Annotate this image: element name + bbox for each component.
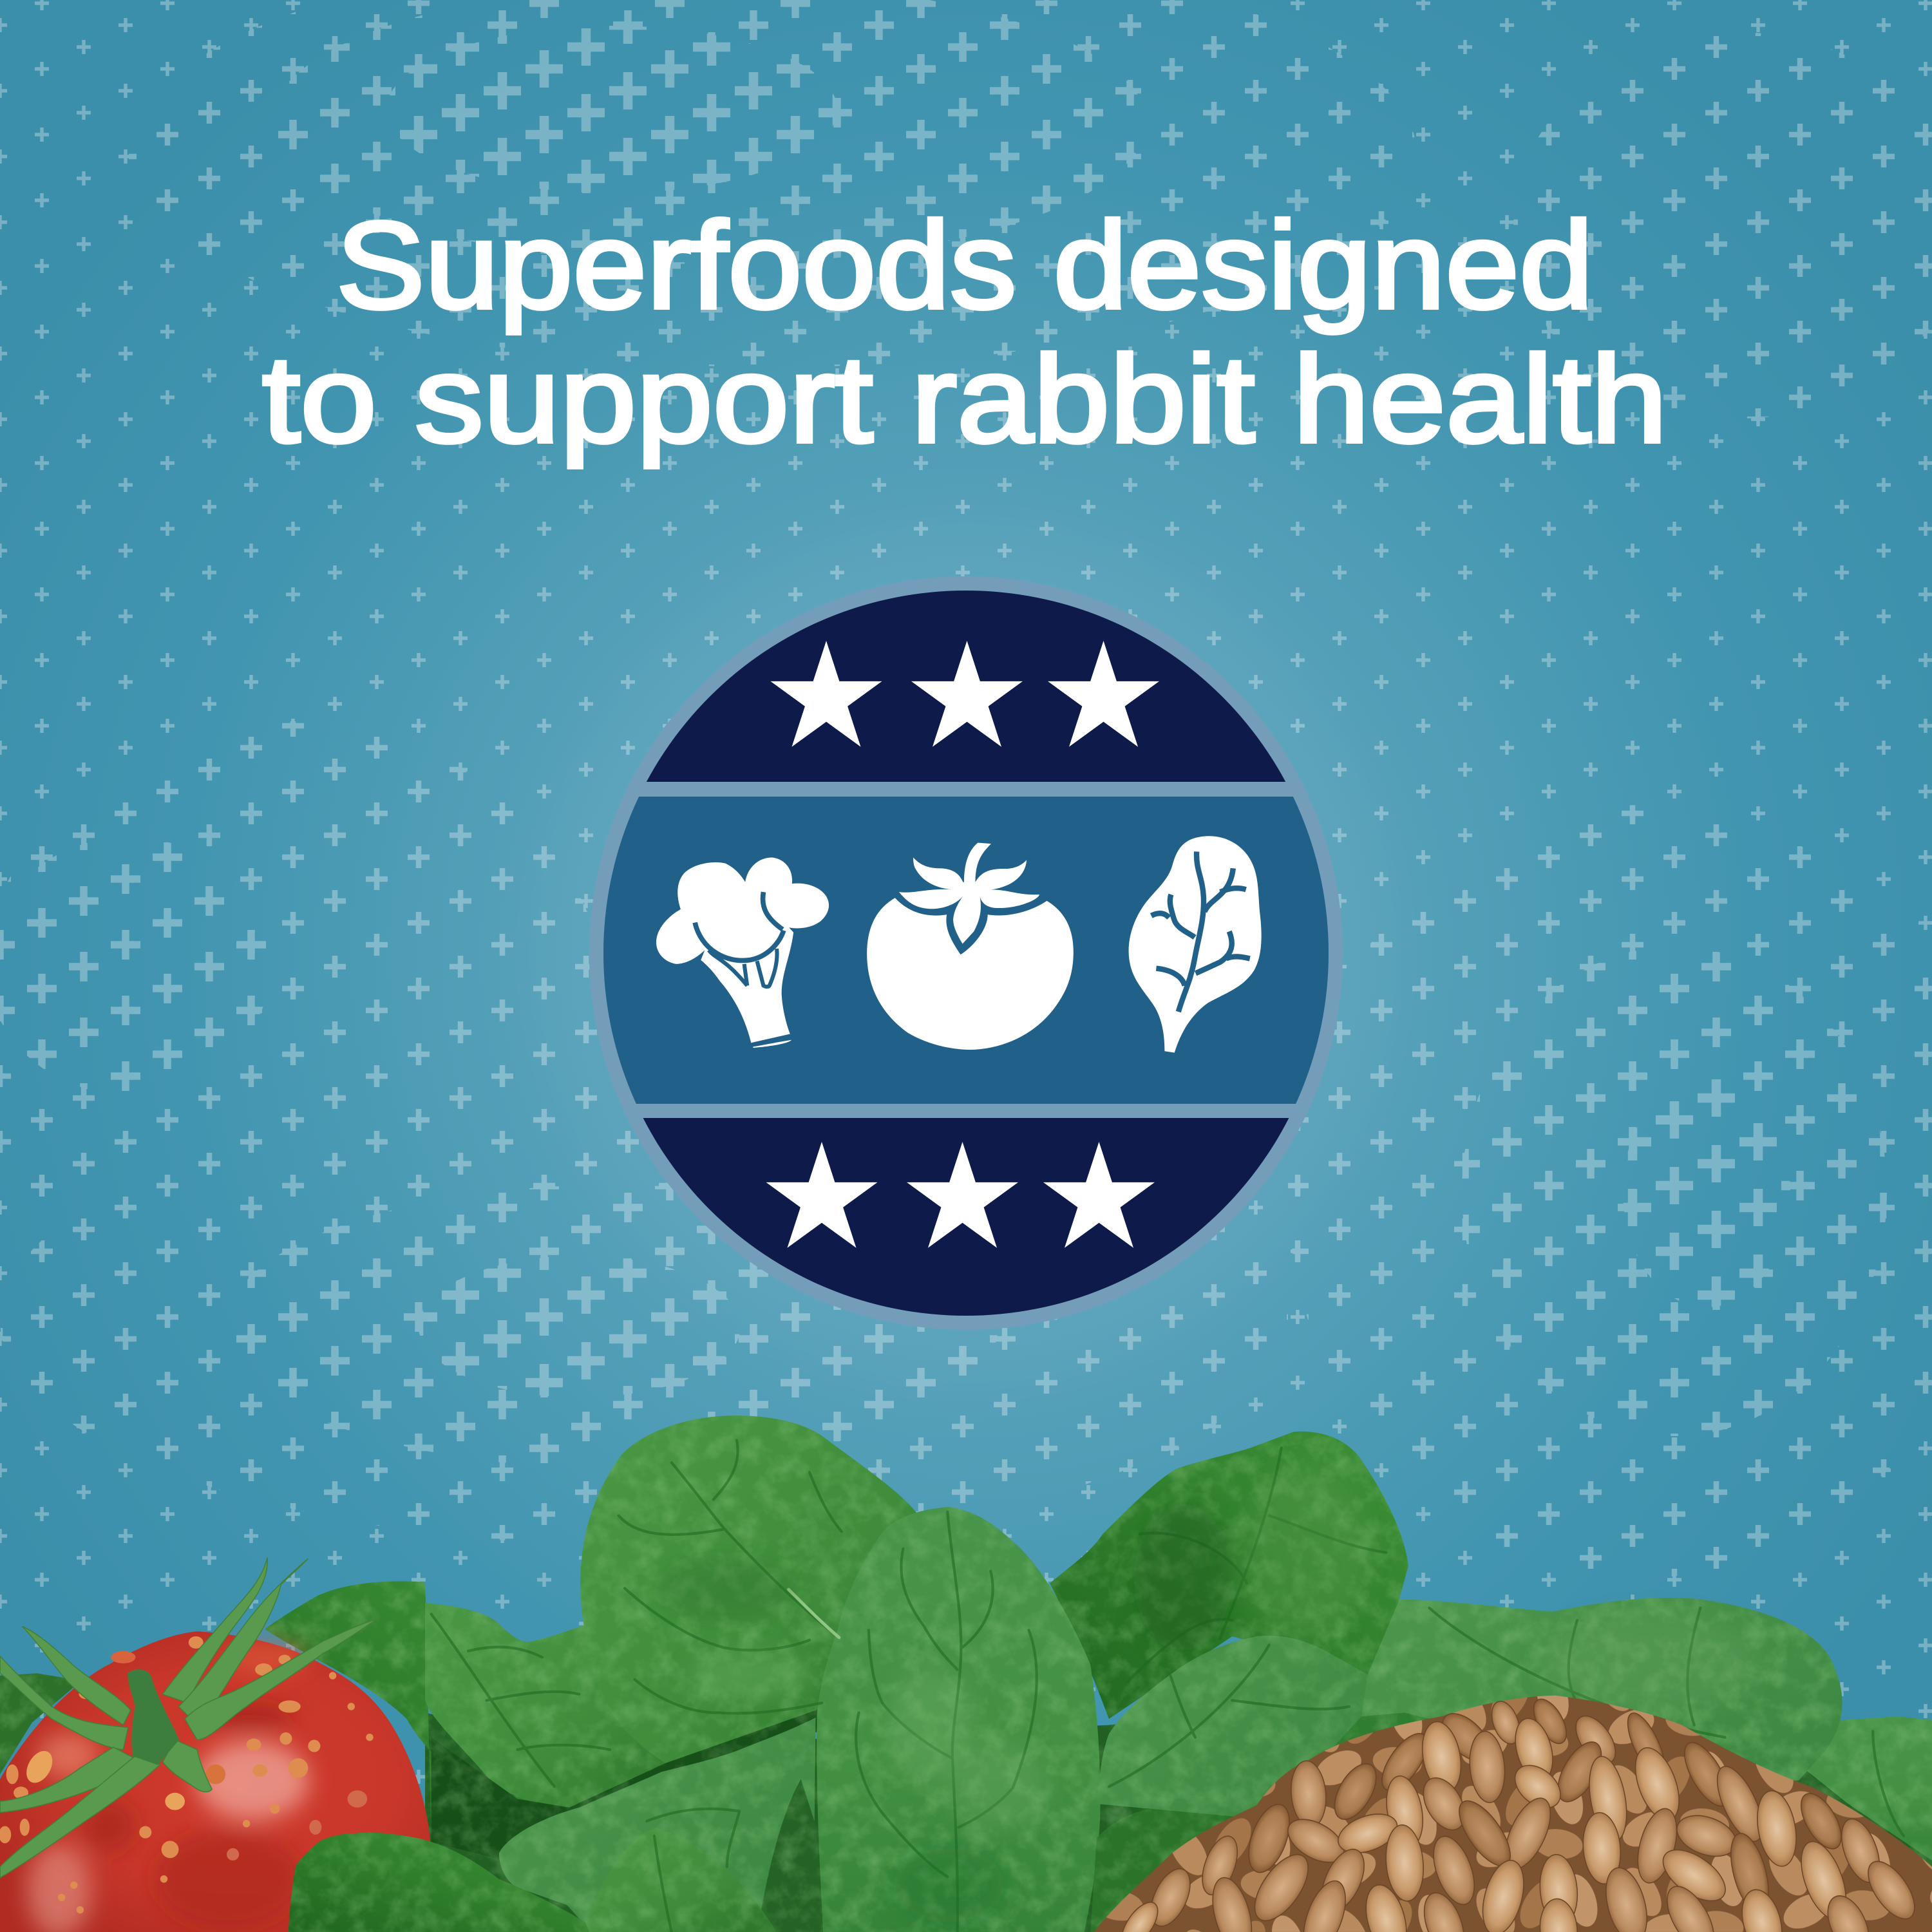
food photo band — [0, 1416, 1932, 1932]
top stars — [770, 641, 1159, 747]
leaf: pale lower — [499, 1718, 816, 1932]
dark shadow behind leaves — [425, 1700, 1932, 1932]
flaxseed pile — [1094, 1694, 1932, 1932]
leaf: centre front — [817, 1507, 1101, 1932]
leaf: mid right front — [1097, 1636, 1368, 1817]
dark shadow at leaf bases — [431, 1709, 838, 1861]
icon: broccoli — [656, 858, 829, 1048]
tomato calyx — [0, 1557, 377, 1878]
tomato body — [0, 1631, 431, 1932]
bottom stars — [766, 1142, 1155, 1248]
leaf: far left — [0, 1673, 81, 1774]
icon: tomato — [867, 843, 1074, 1050]
badge ring — [589, 576, 1343, 1330]
light vein highlight — [788, 1589, 839, 1638]
leaf veins and creases — [431, 1441, 1904, 1932]
leaf: upper centre-left — [580, 1416, 918, 1763]
tomato highlights — [27, 1642, 309, 1932]
badge — [580, 567, 1352, 1337]
leaf: right lower fill — [1282, 1712, 1454, 1824]
tomato — [0, 1557, 431, 1932]
individual seeds — [1115, 1694, 1924, 1932]
title: Superfoods designed — [336, 196, 1593, 334]
leaf: broad right — [1306, 1598, 1842, 1824]
water droplets — [0, 1636, 374, 1913]
spinach leaves — [0, 1416, 1932, 1932]
pile base — [1094, 1696, 1932, 1932]
leaf: left ruffled back — [265, 1582, 567, 1839]
title — [262, 196, 1667, 468]
leaf: dark strip — [758, 1779, 850, 1932]
leaf: front left — [289, 1832, 589, 1932]
title: to support rabbit health — [262, 330, 1667, 468]
leaf: behind seeds — [1090, 1804, 1253, 1932]
leaf: left ruffled — [425, 1603, 690, 1808]
light patches — [659, 1466, 1762, 1922]
icon: spinach leaf — [1129, 836, 1262, 1053]
leaf: front middle — [583, 1827, 776, 1932]
badge bands — [603, 591, 1329, 1316]
leaf: far right — [1805, 1716, 1932, 1861]
leaf: upper right — [1050, 1432, 1408, 1719]
